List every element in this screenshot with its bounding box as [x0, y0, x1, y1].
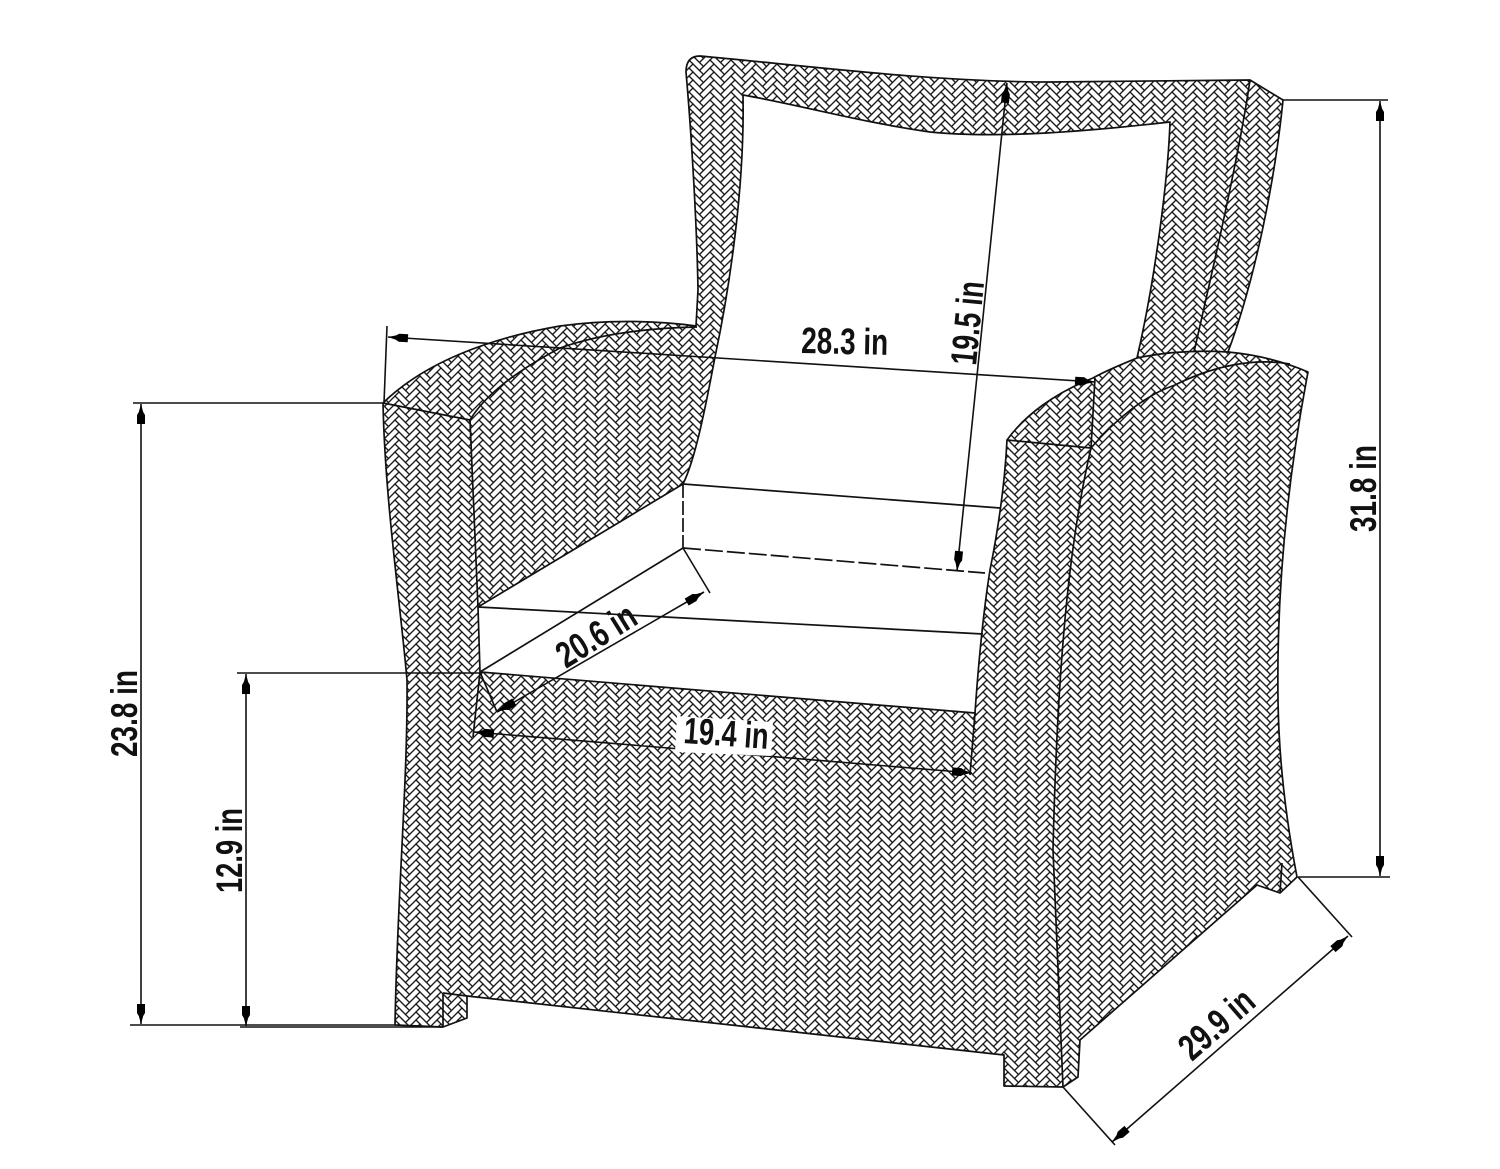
seat cushion lines	[478, 484, 1000, 672]
label background: 19.4 in	[675, 716, 773, 756]
label: 31.8 in: 31.8 in	[1343, 445, 1384, 532]
dimension: arm height 23.8 in	[130, 403, 395, 1025]
dimension: back height 19.5 in	[957, 83, 1007, 571]
open back and seat area	[478, 95, 1170, 713]
label: 29.9 in: 29.9 in	[1170, 980, 1263, 1068]
label: 23.8 in: 23.8 in	[104, 670, 145, 757]
left and right leg details	[443, 863, 1282, 1027]
label: 20.6 in: 20.6 in	[549, 595, 644, 676]
back frame divider line	[1194, 80, 1250, 352]
chair body silhouette with woven fill	[383, 56, 1308, 1087]
right arm detail lines	[970, 351, 1290, 1087]
dimension: overall height 31.8 in	[1283, 100, 1390, 877]
dimension: seat height 12.9 in	[237, 673, 480, 1027]
dimension: seat depth 20.6 in	[480, 548, 710, 712]
dimension: overall depth 29.9 in	[1063, 877, 1352, 1145]
label: 19.5 in: 19.5 in	[943, 279, 992, 367]
dimension lines	[130, 83, 1390, 1145]
dimension: overall width 28.3 in	[384, 326, 1095, 403]
label: 28.3 in: 28.3 in	[801, 320, 889, 363]
dimension: seat width 19.4 in	[474, 732, 972, 773]
chair illustration	[383, 56, 1308, 1087]
left arm detail lines	[383, 327, 697, 737]
label: 12.9 in: 12.9 in	[209, 808, 250, 893]
label: 19.4 in: 19.4 in	[682, 710, 770, 757]
